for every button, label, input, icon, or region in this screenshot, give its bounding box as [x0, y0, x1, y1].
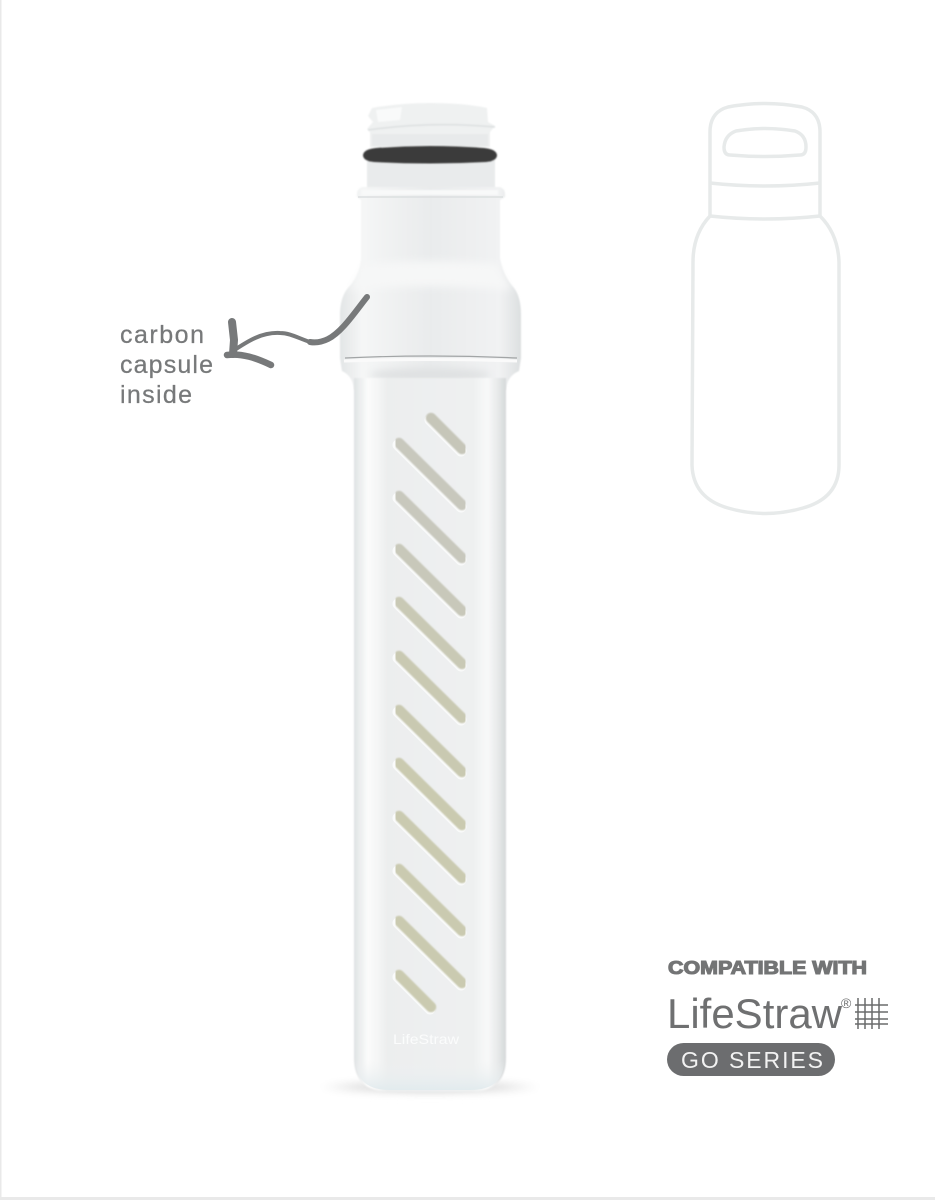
- pill: go series: GO SERIES: [681, 1047, 823, 1073]
- icon: logo grid: [855, 998, 888, 1029]
- label: carbon capsule inside: [120, 321, 213, 409]
- label: carbon capsule inside: capsule: [120, 351, 213, 379]
- product: carbon capsule filter: [318, 103, 542, 1094]
- label: carbon capsule inside: carbon: [120, 321, 204, 349]
- heading: compatible with: COMPATIBLE WITH: [668, 958, 867, 978]
- label: carbon capsule inside: inside: [120, 381, 192, 409]
- diagonal slots highlight: [398, 420, 461, 1009]
- compatibility badge: [667, 958, 888, 1076]
- registered mark: ®: [841, 995, 852, 1011]
- icon: bottle outline: [692, 104, 839, 514]
- arrow: hand-drawn pointer to capsule: [227, 297, 367, 365]
- embossed brand on tube: LifeStraw: [393, 1031, 460, 1047]
- pill: go series: [667, 1043, 835, 1076]
- ground shadow: [318, 1080, 542, 1094]
- tube body: [354, 378, 506, 1092]
- diagonal slots: [399, 418, 462, 1007]
- logo wordmark: LifeStraw: [667, 990, 843, 1037]
- black o-ring: [363, 146, 497, 164]
- collar highlight band: [349, 261, 512, 290]
- neck below ring: [367, 160, 495, 190]
- collar with shoulder and flare: [340, 187, 521, 390]
- threaded top: [367, 103, 495, 147]
